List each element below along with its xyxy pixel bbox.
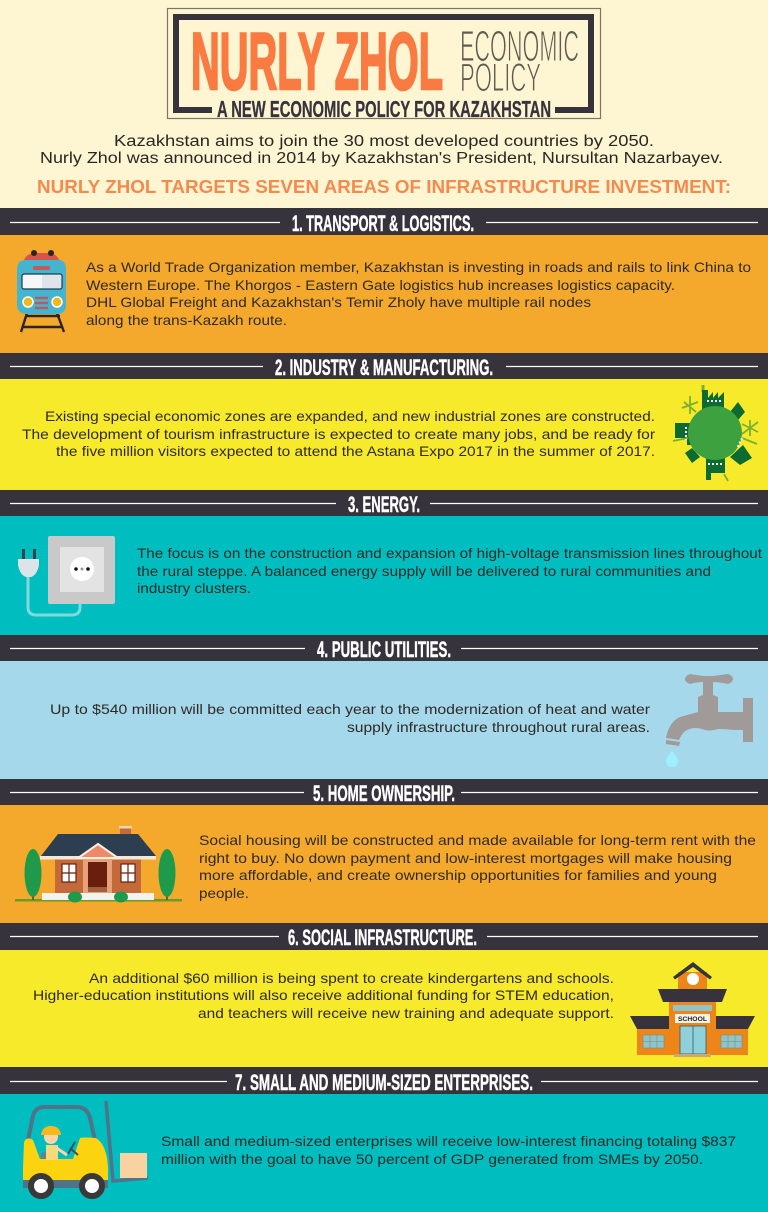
icon: water tap bbox=[666, 674, 753, 767]
text: social: An additional $60 million is being spent to create kindergartens and schools. bbox=[89, 970, 614, 986]
text: social: Higher-education institutions will also receive additional funding for STEM education, bbox=[33, 987, 614, 1003]
text: energy: industry clusters. bbox=[137, 580, 251, 596]
icon: green planet with factories bbox=[673, 385, 758, 481]
panel: public utilities bbox=[0, 635, 768, 779]
text: enterprises bbox=[161, 1133, 736, 1167]
heading 1: 1. TRANSPORT & LOGISTICS. bbox=[292, 211, 474, 236]
intro text: Kazakhstan aims to join the 30 most developed countries by 2050. bbox=[114, 133, 654, 150]
text: industry: Existing special economic zones are expanded, and new industrial zones are constructed. bbox=[45, 408, 655, 424]
panel: energy bbox=[0, 490, 768, 635]
intro text: Nurly Zhol was announced in 2014 by Kazakhstan's President, Nursultan Nazarbayev. bbox=[40, 150, 723, 167]
text: transport: As a World Trade Organization member, Kazakhstan is investing in roads and rails to link China to bbox=[86, 259, 751, 275]
text: industry: the five million visitors expected to attend the Astana Expo 2017 in the summer of 2017. bbox=[56, 443, 655, 459]
icon: plug and socket bbox=[18, 536, 115, 615]
panel: industry and manufacturing bbox=[0, 353, 768, 490]
heading 3: 3. ENERGY. bbox=[348, 492, 420, 517]
text: transport: along the trans-Kazakh route. bbox=[86, 312, 287, 328]
sign text: SCHOOL bbox=[678, 1016, 707, 1023]
text: home bbox=[199, 832, 756, 901]
text: transport: Western Europe. The Khorgos - Eastern Gate logistics hub increases logistics capacity. bbox=[86, 277, 675, 293]
title block: ECONOMIC bbox=[460, 22, 579, 71]
text: industry: The development of tourism infrastructure is expected to create many jobs, and be ready for bbox=[22, 426, 655, 442]
text: energy: The focus is on the construction and expansion of high-voltage transmission lines throughout bbox=[137, 545, 762, 561]
title block: NURLY ZHOL bbox=[191, 17, 443, 107]
title block bbox=[168, 8, 600, 122]
icon: house bbox=[15, 826, 182, 902]
heading 7: 7. SMALL AND MEDIUM-SIZED ENTERPRISES. bbox=[235, 1070, 533, 1095]
panel: home ownership bbox=[0, 779, 768, 923]
icon: train bbox=[17, 250, 66, 332]
text: energy: the rural steppe. A balanced energy supply will be delivered to rural communities and bbox=[137, 563, 711, 579]
icon: school bbox=[630, 962, 755, 1057]
text: social bbox=[33, 970, 614, 1021]
icon: forklift bbox=[23, 1101, 148, 1196]
lead heading: NURLY ZHOL TARGETS SEVEN AREAS OF INFRASTRUCTURE INVESTMENT: bbox=[37, 176, 731, 197]
text: industry bbox=[22, 408, 655, 459]
panel: transport and logistics bbox=[0, 208, 768, 353]
title: Policy: POLICY bbox=[460, 56, 541, 100]
text: utilities: supply infrastructure throughout rural areas. bbox=[347, 719, 650, 735]
intro text bbox=[40, 133, 723, 167]
heading 5: 5. HOME OWNERSHIP. bbox=[313, 781, 455, 806]
text: social: and teachers will receive new training and adequate support. bbox=[198, 1005, 614, 1021]
text: home: Social housing will be constructed and made available for long-term rent with the bbox=[199, 832, 756, 848]
text: enterprises: Small and medium-sized enterprises will receive low-interest financing totaling $837 bbox=[161, 1133, 736, 1149]
text: energy bbox=[137, 545, 762, 596]
panel: small and medium-sized enterprises bbox=[0, 1067, 768, 1212]
text: enterprises: million with the goal to have 50 percent of GDP generated from SMEs by 2050. bbox=[161, 1151, 703, 1167]
text: transport: DHL Global Freight and Kazakhstan's Temir Zholy have multiple rail nodes bbox=[86, 294, 591, 310]
heading 2: 2. INDUSTRY & MANUFACTURING. bbox=[275, 355, 493, 380]
text: utilities bbox=[50, 701, 650, 735]
heading 6: 6. SOCIAL INFRASTRUCTURE. bbox=[288, 925, 477, 950]
text: home: right to buy. No down payment and low-interest mortgages will make housing bbox=[199, 850, 732, 866]
heading 4: 4. PUBLIC UTILITIES. bbox=[317, 637, 451, 662]
text: transport bbox=[86, 259, 751, 328]
subtitle: A NEW ECONOMIC POLICY FOR KAZAKHSTAN bbox=[217, 96, 551, 122]
text: home: more affordable, and create ownership opportunities for families and young bbox=[199, 867, 717, 883]
text: home: people. bbox=[199, 885, 249, 901]
panel: social infrastructure bbox=[0, 923, 768, 1067]
text: utilities: Up to $540 million will be committed each year to the modernization of heat and water bbox=[50, 701, 650, 717]
